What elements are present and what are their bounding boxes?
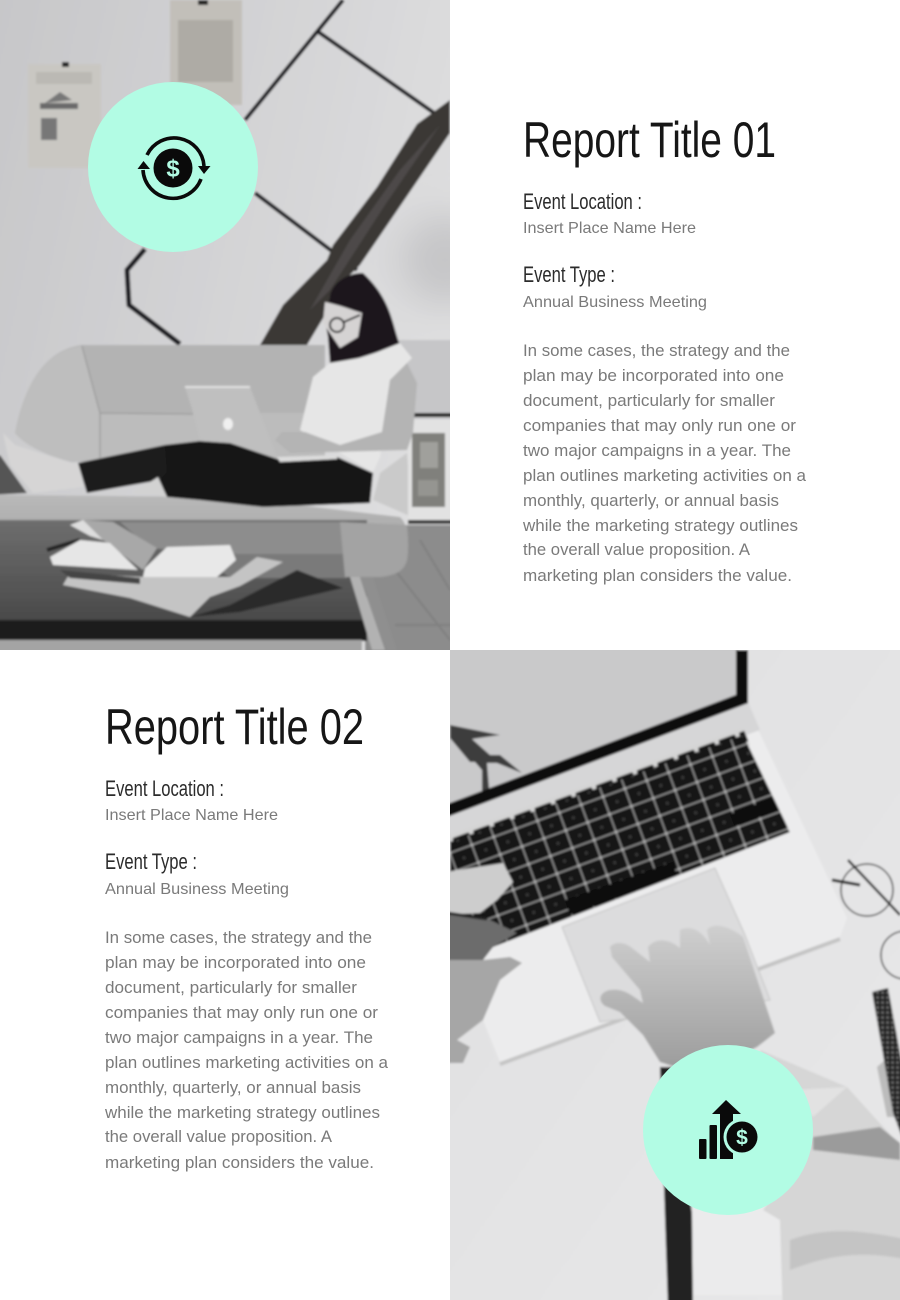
body text 02: In some cases, the strategy and the xyxy=(105,929,372,947)
event type 02: Annual Business Meeting xyxy=(105,881,289,898)
event type 02 xyxy=(105,849,289,898)
panel: report 02 text xyxy=(104,699,389,1172)
ruler bottom xyxy=(660,1067,693,1300)
sofa right arm xyxy=(374,454,408,514)
body text 02: plan outlines marketing activities on a xyxy=(105,1054,389,1072)
body text 01 xyxy=(522,342,807,585)
body text 01: marketing plan considers the value. xyxy=(523,567,792,585)
body text 01: two major campaigns in a year. The xyxy=(523,442,791,460)
poster: top xyxy=(170,0,242,105)
event location 01: Insert Place Name Here xyxy=(523,220,696,237)
event type 02: Event Type : xyxy=(105,849,197,874)
photo: hands on laptop keyboard xyxy=(430,630,900,1300)
event type 01: Annual Business Meeting xyxy=(523,294,707,311)
keyboard xyxy=(450,730,791,948)
left hand xyxy=(440,863,513,915)
laptop screen xyxy=(450,650,738,805)
right hand xyxy=(600,926,775,1075)
body text 01: while the marketing strategy outlines xyxy=(522,517,798,535)
event location 02 xyxy=(105,776,278,824)
panel: report 01 text xyxy=(522,112,807,585)
body text 01: companies that may only run one or xyxy=(523,417,797,435)
sleeve xyxy=(760,1050,900,1300)
laptop xyxy=(186,388,259,444)
body text 02: the overall value proposition. A xyxy=(105,1128,332,1146)
sofa back xyxy=(78,343,326,414)
ruler right xyxy=(877,1060,895,1117)
foot xyxy=(5,437,78,491)
table leg xyxy=(360,576,368,594)
shirt xyxy=(300,343,412,472)
wooden beam xyxy=(260,100,450,345)
body text 01: plan outlines marketing activities on a xyxy=(523,467,807,485)
body text 02: document, particularly for smaller xyxy=(105,979,358,997)
event type 01: Event Type : xyxy=(523,262,615,287)
body text 01: monthly, quarterly, or annual basis xyxy=(523,492,779,510)
seat overlap xyxy=(340,522,408,577)
picture frame right xyxy=(408,413,453,524)
body text 02: two major campaigns in a year. The xyxy=(105,1029,373,1047)
title 01: Report Title 01 xyxy=(523,112,776,168)
glasses xyxy=(832,860,900,979)
body text 01: document, particularly for smaller xyxy=(523,392,776,410)
body text 01: plan may be incorporated into one xyxy=(523,367,784,385)
wall frame lines xyxy=(127,0,447,344)
title 02: Report Title 02 xyxy=(105,699,364,755)
event location 02: Event Location : xyxy=(105,776,224,801)
face xyxy=(323,302,362,348)
body text 02 xyxy=(104,929,389,1172)
icon: bars, up arrow and dollar coin: $ xyxy=(736,1126,748,1150)
enter key xyxy=(730,799,777,827)
body text 01: the overall value proposition. A xyxy=(523,541,750,559)
icon: dollar coin with circular arrows xyxy=(138,138,210,198)
book and magazines xyxy=(47,520,343,617)
coffee table xyxy=(0,520,367,625)
arm xyxy=(302,364,417,453)
body text 02: marketing plan considers the value. xyxy=(105,1154,374,1172)
spacebar xyxy=(565,862,677,915)
body text 02: monthly, quarterly, or annual basis xyxy=(105,1079,361,1097)
event location 02: Insert Place Name Here xyxy=(105,807,278,824)
event location 01 xyxy=(523,189,696,237)
trackpad xyxy=(562,868,770,1022)
hair xyxy=(325,273,400,363)
icon: dollar coin with circular arrows: $ xyxy=(166,156,180,182)
body text 02: plan may be incorporated into one xyxy=(105,954,366,972)
icon: bars, up arrow and dollar coin xyxy=(699,1100,760,1159)
plant xyxy=(450,725,522,800)
event type 01 xyxy=(523,262,707,311)
event location 01: Event Location : xyxy=(523,189,642,214)
paper xyxy=(692,1150,802,1295)
pants xyxy=(158,441,373,507)
body text 01: In some cases, the strategy and the xyxy=(523,342,790,360)
body text 02: while the marketing strategy outlines xyxy=(104,1104,380,1122)
photo: woman with laptop on sofa xyxy=(0,0,450,650)
screen bezel xyxy=(430,650,742,817)
icon badge: growth xyxy=(643,1045,813,1215)
sofa seat xyxy=(0,494,406,526)
woman xyxy=(0,273,417,507)
body text 02: companies that may only run one or xyxy=(105,1004,379,1022)
poster: left xyxy=(28,62,101,168)
icon badge: money cycle xyxy=(88,82,258,252)
laptop body xyxy=(484,732,821,1061)
floor xyxy=(364,524,450,650)
laptop shadow xyxy=(500,939,840,1064)
